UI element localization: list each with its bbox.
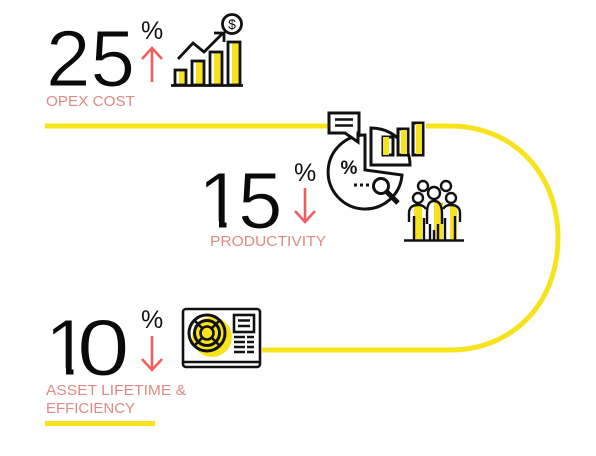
bottom yellow rule bbox=[45, 421, 155, 426]
number 1 of 10: 1 bbox=[45, 303, 90, 392]
metric: opex cost bbox=[46, 14, 163, 110]
icon: growth chart with dollar coin: $ bbox=[228, 16, 236, 32]
percent sign: % bbox=[294, 159, 316, 187]
number 15: 1 bbox=[198, 156, 242, 245]
arrow down bbox=[295, 188, 315, 222]
icon: pie chart analysis bbox=[328, 113, 426, 209]
number 0 of 10: 0 bbox=[77, 303, 129, 392]
metric: asset lifetime and efficiency bbox=[45, 303, 186, 417]
icon: group of people bbox=[404, 181, 464, 240]
number 25: 25 bbox=[46, 14, 135, 103]
foot mask on the 1 bbox=[47, 368, 88, 377]
label: productivity: PRODUCTIVITY bbox=[210, 233, 326, 250]
arrow up bbox=[142, 48, 162, 82]
label: opex cost: OPEX COST bbox=[46, 93, 135, 110]
arrow down bbox=[142, 336, 162, 370]
metric: productivity bbox=[198, 156, 326, 250]
icon: pie chart analysis: % bbox=[341, 158, 358, 179]
number 15: 5 bbox=[238, 156, 282, 245]
icon: growth chart with dollar coin bbox=[171, 14, 243, 86]
foot mask on the 1 bbox=[200, 221, 239, 230]
yellow connector path bbox=[45, 126, 558, 350]
percent sign: % bbox=[141, 17, 163, 45]
icon: air conditioner outdoor unit bbox=[183, 309, 260, 367]
label: asset lifetime and efficiency: ASSET LIFETIME & bbox=[46, 382, 186, 399]
label: asset lifetime and efficiency: EFFICIENCY bbox=[46, 400, 135, 417]
percent sign: % bbox=[141, 306, 163, 334]
